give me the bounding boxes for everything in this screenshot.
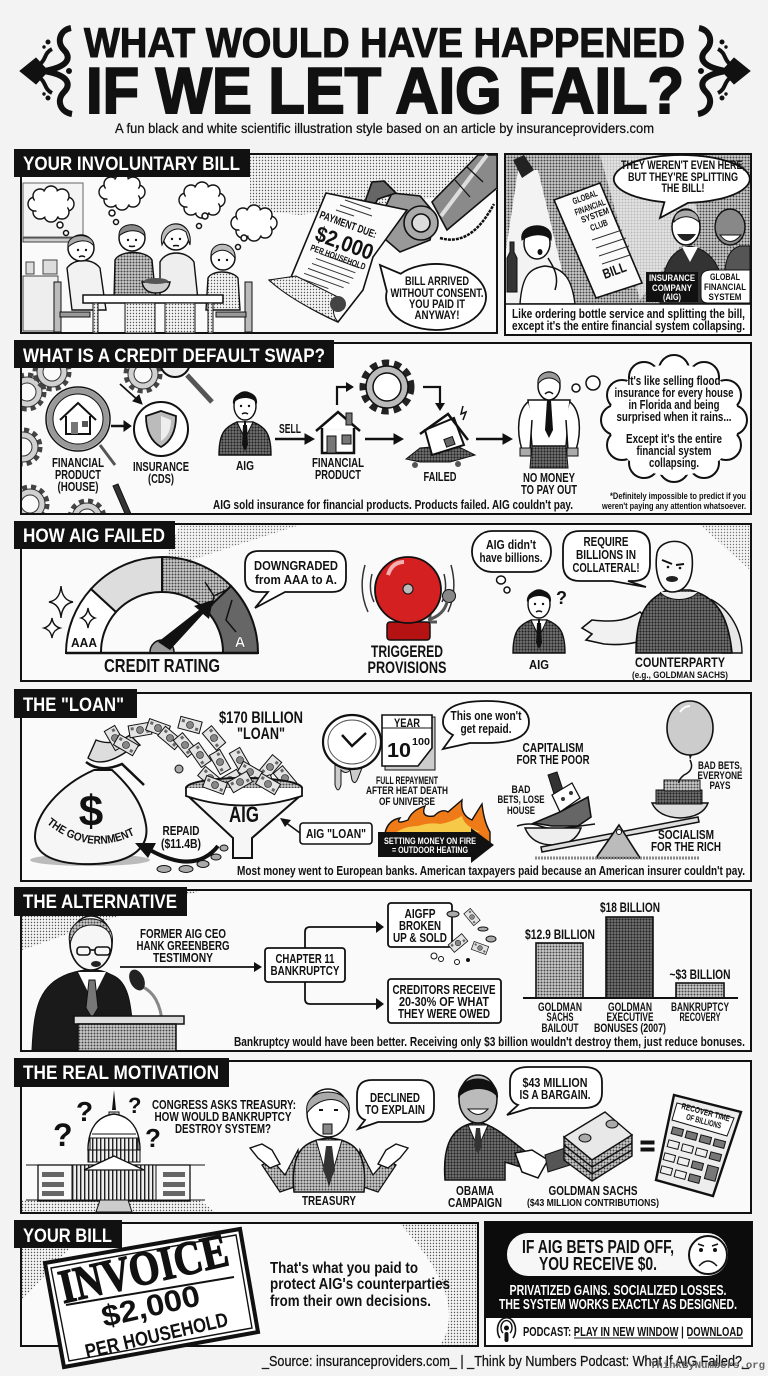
- label: financial product house: FINANCIAL: [52, 456, 104, 470]
- capitol building: [22, 1090, 215, 1212]
- thought cloud: flood insurance: in Florida and being: [628, 398, 720, 412]
- family at table: [54, 224, 252, 333]
- arrow: setting money on fire: = OUTDOOR HEATING: [392, 845, 468, 856]
- label: global financial system: GLOBAL: [710, 272, 740, 282]
- heading: the alternative: THE ALTERNATIVE: [23, 892, 177, 913]
- treasury figure: [250, 1089, 408, 1192]
- label: full repayment: FULL REPAYMENT: [376, 775, 438, 787]
- sinking ship: [517, 772, 595, 829]
- panel: the real motivation: [21, 1061, 751, 1213]
- heading: how AIG failed: HOW AIG FAILED: [23, 526, 165, 547]
- speech bubble: downgraded: [245, 551, 346, 608]
- connector arrows: [305, 921, 384, 1010]
- label: bad bets everyone pays: BAD BETS,: [698, 760, 742, 772]
- bar chart: ~$3 BILLION: [670, 966, 730, 982]
- money stacks: [564, 1112, 632, 1181]
- icon: gear with arrows: [337, 363, 445, 411]
- club bill: BILL: [600, 259, 629, 282]
- label: global financial system: [701, 270, 750, 303]
- callout: if AIG bets paid off: [507, 1233, 728, 1276]
- bar chart: GOLDMAN: [538, 1002, 582, 1014]
- caption: [505, 304, 751, 334]
- club bill: FINANCIAL: [573, 197, 607, 217]
- kitchen background: [23, 183, 83, 331]
- box: AIG loan: AIG "LOAN": [306, 826, 366, 841]
- box: AIGFP: AIGFP: [404, 906, 436, 921]
- thought bubble: AIG didn't have billions: have billions.: [480, 550, 542, 565]
- label: repaid: REPAID: [162, 823, 200, 838]
- debris: [431, 908, 496, 964]
- label: insurance company: [646, 272, 698, 302]
- label: triggered provisions: TRIGGERED: [371, 643, 443, 661]
- text: what you paid: [270, 1260, 450, 1310]
- thought bubble: AIG didn't have billions: AIG didn't: [486, 537, 537, 552]
- question marks: ?: [145, 1123, 161, 1153]
- man with empty pockets: [519, 372, 579, 468]
- text: what you paid: protect AIG's counterparties: [270, 1276, 450, 1293]
- label: counterparty: COUNTERPARTY: [635, 654, 726, 670]
- speech bubble: bill arrived: [380, 264, 486, 330]
- speech bubble: bill arrived: WITHOUT CONSENT.: [390, 286, 484, 300]
- watermark: ThinkByNumbers.org: [650, 1360, 765, 1372]
- speech bubble: $43 million: IS A BARGAIN.: [520, 1087, 590, 1102]
- money stack on plate: [656, 780, 702, 804]
- speech bubble: declined to explain: DECLINED: [370, 1090, 420, 1105]
- funnel AIG: AIG: [229, 802, 259, 827]
- arrow: to failed: [365, 434, 403, 444]
- speech bubble: $43 million: $43 MILLION: [522, 1075, 588, 1090]
- gauge chart: A: [235, 634, 246, 651]
- text: what you paid: That's what you paid to: [270, 1260, 418, 1277]
- calendar year 10^100: 10: [387, 740, 411, 762]
- heading: the loan: THE "LOAN": [23, 695, 124, 716]
- melting clock: [323, 715, 381, 790]
- thought cloud: flood insurance: surprised when it rains...: [616, 410, 732, 424]
- icon: question mark: ?: [556, 588, 567, 608]
- bar chart: RECOVERY: [680, 1012, 721, 1024]
- subtitle: A fun black and white scientific illustration style based on an article by insuranceproviders.com: [115, 120, 654, 136]
- speech bubble: splitting the bill: THE BILL!: [662, 181, 704, 195]
- Obama campaign figure: [445, 1075, 530, 1180]
- label: congress asks treasury: [152, 1097, 296, 1136]
- speech bubble: require billions: REQUIRE: [584, 534, 629, 549]
- label: obama campaign: OBAMA: [456, 1183, 494, 1198]
- footnote: [601, 491, 746, 511]
- label: bad bets everyone pays: EVERYONE: [698, 770, 742, 782]
- label: financial product: PRODUCT: [315, 468, 361, 482]
- thought clouds: [28, 174, 277, 250]
- question marks: ?: [76, 1096, 93, 1127]
- label: bad bets lose house: BETS, LOSE: [498, 794, 544, 806]
- speech bubble: this one won't get repaid: This one won't: [450, 708, 522, 723]
- speech bubble: bill arrived: ANYWAY!: [414, 308, 460, 322]
- balloon: [667, 701, 713, 783]
- flames: [385, 800, 490, 845]
- icon: collapsed house: [406, 406, 475, 468]
- speech bubble: require billions: [563, 531, 650, 587]
- icon: red alarm bell: [362, 557, 456, 640]
- sparkles: [44, 586, 95, 638]
- label: congress asks treasury: CONGRESS ASKS TREASURY:: [152, 1097, 296, 1112]
- heading: your bill: YOUR BILL: [23, 1226, 112, 1247]
- label: former AIG CEO: [136, 926, 230, 965]
- title line 1: WHAT WOULD HAVE HAPPENED: [84, 19, 685, 66]
- label: bad bets everyone pays: PAYS: [710, 780, 730, 792]
- calendar year 10^100: YEAR: [394, 716, 420, 730]
- calculator: [656, 1095, 741, 1196]
- money bag: THE GOVERNMENT: [48, 817, 133, 844]
- calculator: OF BILLIONS: [685, 1112, 723, 1131]
- Greenberg at podium: [32, 916, 184, 1051]
- club bill: GLOBAL: [571, 188, 599, 206]
- repaid arrow and coins: [135, 765, 228, 872]
- box: creditors receive: 20-30% OF WHAT: [399, 994, 489, 1009]
- label: $170 billion loan: "LOAN": [237, 724, 285, 743]
- equals sign: [641, 1141, 654, 1151]
- label: no money: NO MONEY: [523, 471, 576, 485]
- panel: your bill: [21, 1223, 478, 1367]
- text: what you paid: from their own decisions.: [270, 1293, 431, 1310]
- bar chart: GOLDMAN: [608, 1002, 652, 1014]
- gauge chart: [66, 557, 258, 653]
- label: insurance company: COMPANY: [652, 283, 692, 293]
- label: insurance company: (AIG): [663, 292, 681, 302]
- flying bills: [104, 716, 297, 793]
- label: former AIG CEO: HANK GREENBERG: [136, 938, 230, 953]
- speech bubble: declined to explain: [357, 1080, 434, 1129]
- label: capitalism for the poor: [516, 740, 590, 767]
- robot arm: [362, 155, 497, 252]
- label: bad bets lose house: HOUSE: [507, 805, 535, 817]
- money bag: $: [79, 787, 103, 836]
- bar chart: [523, 899, 738, 1035]
- arrow: sell: [275, 422, 314, 444]
- spotlight: [513, 155, 534, 178]
- laughing executives: [660, 209, 750, 304]
- club bill: [554, 183, 642, 298]
- label: repaid: ($11.4B): [161, 836, 201, 851]
- gauge chart: AAA: [71, 635, 98, 650]
- callout: if AIG bets paid off: IF AIG BETS PAID OFF,: [522, 1237, 674, 1257]
- box: chapter 11: CHAPTER 11: [276, 951, 334, 966]
- label: goldman sachs: ($43 MILLION CONTRIBUTIONS): [527, 1198, 659, 1209]
- speech bubble: splitting the bill: [614, 155, 750, 218]
- box: creditors receive: THEY WERE OWED: [398, 1006, 490, 1021]
- label: bad bets everyone pays: [698, 760, 742, 792]
- heading: what is a credit default swap: WHAT IS A CREDIT DEFAULT SWAP?: [23, 346, 325, 367]
- bill amount text: PER HOUSEHOLD: [309, 243, 367, 272]
- label: AIG: AIG: [529, 657, 549, 672]
- title line 2: IF WE LET AIG FAIL?: [86, 54, 684, 127]
- label: treasury: TREASURY: [302, 1193, 356, 1208]
- handshake: [515, 1148, 570, 1178]
- label: counterparty: (e.g., GOLDMAN SACHS): [632, 670, 728, 681]
- shocked man: [520, 226, 575, 304]
- heading: how AIG failed: [14, 521, 175, 549]
- panel: the loan: [20, 692, 752, 882]
- panel: how AIG failed: [21, 524, 751, 681]
- thought cloud: flood insurance: collapsing.: [649, 456, 699, 470]
- box: chapter 11: [265, 948, 345, 982]
- speech bubble: this one won't get repaid: get repaid.: [460, 721, 512, 736]
- label: no money: [521, 471, 577, 497]
- money bag: [30, 734, 150, 866]
- arrow: setting money on fire: SETTING MONEY ON FIRE: [384, 836, 476, 847]
- bill scroll: [269, 193, 407, 322]
- background gears: [22, 368, 214, 513]
- arrow: testimony to bankruptcy: [120, 962, 262, 972]
- panel: bottle service comic: [505, 154, 751, 335]
- panel: what is a credit default swap: [20, 342, 752, 515]
- bill amount text: [309, 209, 378, 272]
- AIG figure: [219, 392, 271, 455]
- arrow: sell: SELL: [279, 422, 301, 436]
- box: AIGFP: UP & SOLD: [393, 930, 447, 945]
- caption: AIG sold insurance for financial products. Products failed. AIG couldn't pay.: [213, 497, 573, 512]
- invoice stamp: INVOICE: [54, 1224, 233, 1314]
- question marks: [53, 1093, 161, 1153]
- text: privatized gains: [499, 1282, 737, 1313]
- box: AIGFP: BROKEN: [399, 918, 441, 933]
- heading: the real motivation: THE REAL MOTIVATION: [23, 1063, 219, 1084]
- label: goldman sachs: GOLDMAN SACHS: [548, 1183, 638, 1198]
- callout: if AIG bets paid off: YOU RECEIVE $0.: [539, 1254, 657, 1274]
- label: full repayment: OF UNIVERSE: [379, 796, 435, 808]
- thought cloud: flood insurance: [572, 355, 747, 482]
- speech bubble: downgraded: DOWNGRADED: [254, 558, 338, 573]
- speech bubble: require billions: BILLIONS IN: [576, 547, 636, 562]
- heading: your bill: [14, 1220, 122, 1248]
- arrow: to no money: [476, 434, 512, 444]
- label: socialism for the rich: SOCIALISM: [658, 827, 714, 842]
- thought cloud: flood insurance: It's like selling flood: [628, 374, 720, 388]
- bill amount text: PAYMENT DUE:: [318, 209, 378, 241]
- speech bubble: bill arrived: YOU PAID IT: [409, 297, 466, 311]
- label: socialism for the rich: FOR THE RICH: [651, 839, 721, 854]
- label: socialism for the rich: [651, 827, 721, 854]
- icon: podcast: [498, 1318, 516, 1342]
- thought cloud: flood insurance: Except it's the entire: [626, 432, 722, 446]
- bar chart: $18 BILLION: [600, 899, 660, 915]
- invoice stamp: [45, 1224, 258, 1367]
- label: triggered provisions: [368, 643, 446, 677]
- title: [20, 19, 750, 127]
- title ornament right: [698, 28, 750, 114]
- bar chart: SACHS: [546, 1012, 574, 1024]
- label: full repayment: AFTER HEAT DEATH: [366, 785, 448, 797]
- funnel AIG: [186, 771, 302, 858]
- bar chart: EXECUTIVE: [606, 1012, 654, 1024]
- arrows to shield: [111, 384, 142, 431]
- bill amount text: $2,000: [312, 221, 377, 265]
- speech bubble: $43 million: [507, 1067, 602, 1115]
- panel: your involuntary bill: [21, 154, 497, 333]
- label: former AIG CEO: TESTIMONY: [153, 950, 213, 965]
- label: goldman sachs: [527, 1183, 659, 1209]
- heading: the alternative: [14, 887, 187, 916]
- calendar year 10^100: [382, 715, 435, 770]
- arrow: setting money on fire: [378, 828, 494, 863]
- heading: your involuntary bill: [14, 149, 250, 177]
- label: congress asks treasury: DESTROY SYSTEM?: [175, 1121, 271, 1136]
- label: counterparty: [632, 654, 728, 681]
- question marks: ?: [128, 1093, 141, 1118]
- speech bubble: declined to explain: TO EXPLAIN: [365, 1102, 425, 1117]
- label: insurance cds: (CDS): [148, 472, 174, 486]
- label: insurance company: INSURANCE: [649, 273, 695, 283]
- label: $170 billion loan: $170 BILLION: [219, 708, 303, 727]
- calendar year 10^100: 100: [412, 737, 430, 748]
- box: creditors receive: CREDITORS RECEIVE: [392, 982, 496, 997]
- box: AIGFP: [388, 903, 452, 947]
- bar chart: BANKRUPTCY: [671, 1002, 729, 1014]
- speech bubble: bill arrived: BILL ARRIVED: [405, 274, 469, 288]
- bar chart: BONUSES (2007): [594, 1023, 666, 1035]
- panel: the alternative: [21, 890, 751, 1051]
- label: capitalism for the poor: FOR THE POOR: [516, 752, 590, 767]
- icon: shield: [134, 402, 188, 456]
- speech bubble: require billions: COLLATERAL!: [572, 560, 640, 575]
- invoice stamp: PER HOUSEHOLD: [83, 1309, 230, 1363]
- label: credit rating: CREDIT RATING: [104, 656, 220, 676]
- bottle: [507, 242, 517, 292]
- bar chart: $12.9 BILLION: [525, 926, 595, 942]
- label: insurance cds: [133, 460, 189, 486]
- bar chart: BAILOUT: [542, 1023, 578, 1035]
- label: no money: TO PAY OUT: [521, 483, 577, 497]
- panel: privatized gains: [485, 1222, 752, 1346]
- calculator: RECOVER TIME: [680, 1101, 731, 1123]
- label: global financial system: SYSTEM: [708, 292, 742, 302]
- speech bubble: downgraded: from AAA to A.: [255, 572, 337, 587]
- label: financial product house: [52, 456, 104, 494]
- invoice stamp: $2,000: [98, 1279, 203, 1334]
- label: AIG: AIG: [236, 459, 254, 473]
- label: obama campaign: CAMPAIGN: [448, 1195, 502, 1210]
- thought cloud: flood insurance: financial system: [636, 444, 712, 458]
- heading: what is a credit default swap: [14, 340, 334, 368]
- label: global financial system: FINANCIAL: [704, 282, 746, 292]
- speech bubble: this one won't get repaid: [443, 701, 529, 749]
- icon: house: [316, 412, 360, 453]
- seesaw: [525, 803, 708, 858]
- label: obama campaign: [448, 1183, 502, 1210]
- box: creditors receive: [388, 979, 501, 1023]
- thought bubble: AIG didn't have billions: [472, 531, 551, 593]
- label: financial product house: (HOUSE): [58, 480, 98, 494]
- box: chapter 11: BANKRUPTCY: [270, 963, 340, 978]
- label: insurance cds: INSURANCE: [133, 460, 189, 474]
- question marks: ?: [53, 1117, 73, 1153]
- label: congress asks treasury: HOW WOULD BANKRUPTCY: [154, 1109, 292, 1124]
- heading: the loan: [14, 689, 137, 718]
- label: triggered provisions: PROVISIONS: [368, 659, 446, 677]
- label: $170 billion loan: [219, 708, 303, 743]
- label: bad bets lose house: BAD: [512, 784, 531, 796]
- club bill: CLUB: [589, 217, 609, 233]
- icon: house in magnifier: [46, 387, 115, 465]
- icon: sad face: [689, 1236, 727, 1274]
- label: repaid: [161, 823, 201, 851]
- label: financial product: FINANCIAL: [312, 456, 364, 470]
- label: bad bets lose house: [498, 784, 544, 817]
- label: capitalism for the poor: CAPITALISM: [522, 740, 584, 755]
- club bill: SYSTEM: [580, 206, 610, 225]
- label: failed: FAILED: [424, 470, 456, 484]
- box: AIG loan: [280, 818, 372, 844]
- label: financial product: [312, 456, 364, 482]
- counterparty figure: [582, 541, 742, 653]
- heading: the real motivation: [14, 1058, 229, 1087]
- label: full repayment: [366, 775, 448, 808]
- title ornament left: [20, 28, 72, 114]
- label: former AIG CEO: FORMER AIG CEO: [140, 926, 226, 941]
- AIG figure worried: [513, 590, 565, 653]
- label: financial product house: PRODUCT: [55, 468, 101, 482]
- heading: your involuntary bill: YOUR INVOLUNTARY BILL: [23, 154, 240, 175]
- thought cloud: flood insurance: insurance for every house: [614, 386, 734, 400]
